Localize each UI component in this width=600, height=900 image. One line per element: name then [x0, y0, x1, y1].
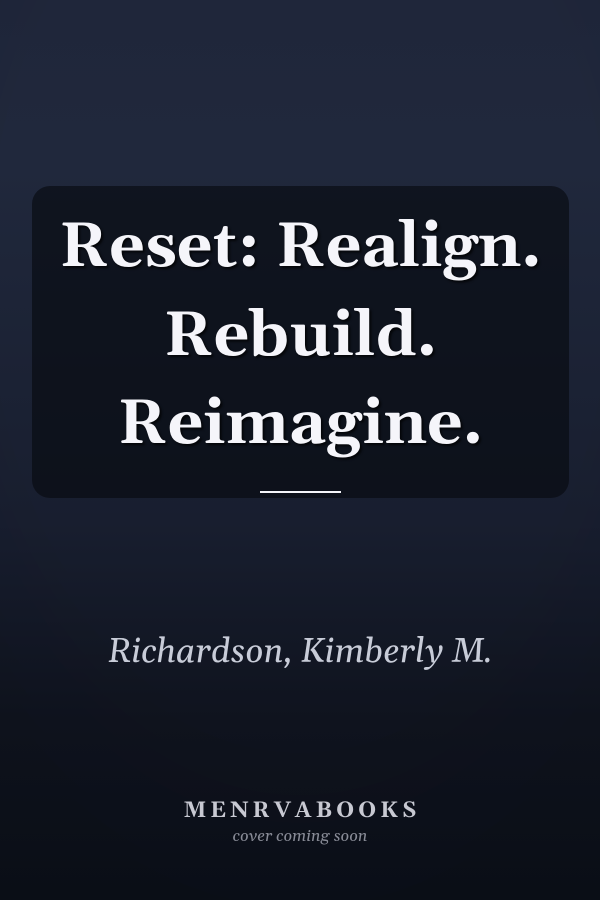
title: Rebuild. — [164, 298, 437, 377]
title — [59, 209, 542, 465]
tagline: cover coming soon — [233, 826, 367, 847]
title: Reimagine. — [118, 386, 483, 465]
divider — [260, 491, 341, 493]
publisher: MENRVABOOKS — [184, 797, 420, 825]
title: Reset: Realign. — [59, 209, 542, 288]
author: Richardson, Kimberly M. — [107, 630, 493, 674]
title panel — [32, 186, 569, 498]
